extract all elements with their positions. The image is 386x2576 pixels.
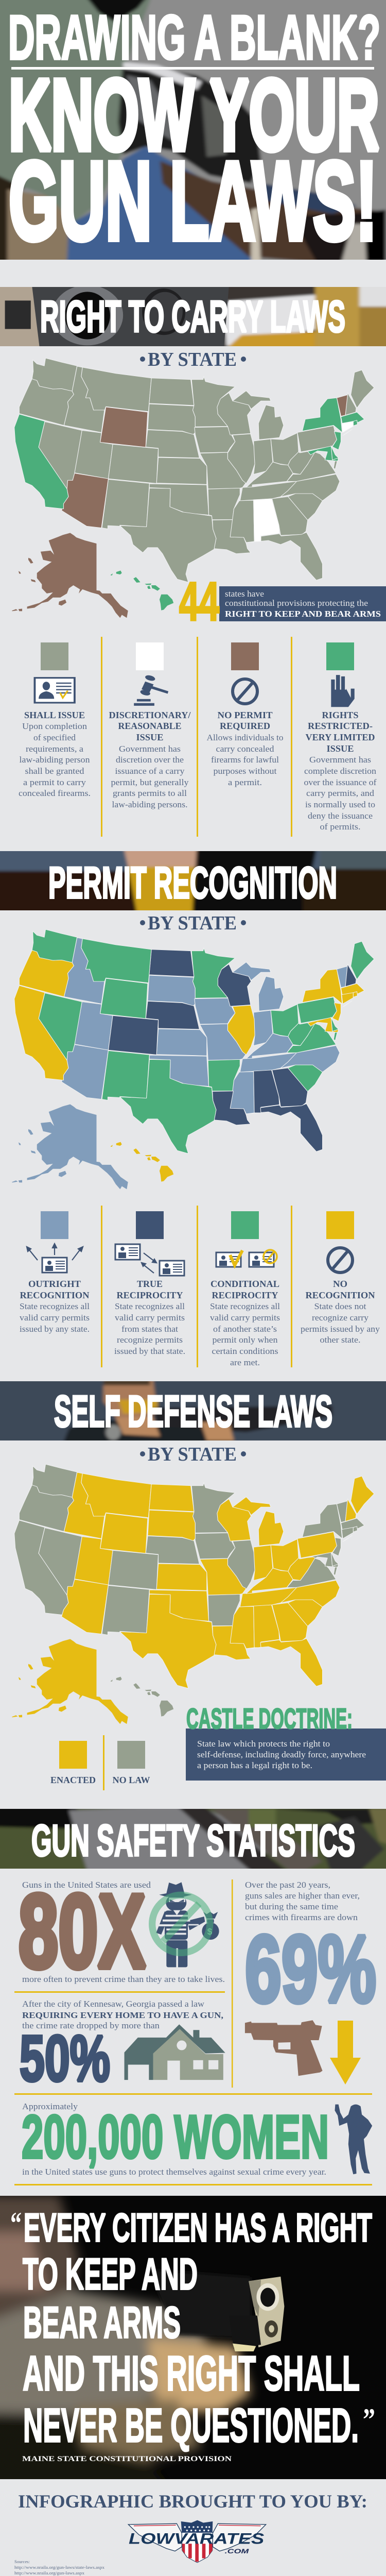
legend column: no permit required: firearms for lawful: [211, 755, 279, 765]
stat: 200,000 women: in the United states use guns to protect themselves against sexual crime every year.: [22, 2167, 326, 2177]
legend column: no recognition: RECOGNITION: [306, 1290, 375, 1300]
quote text: TO KEEP AND: [23, 2249, 198, 2299]
credit heading: INFOGRAPHIC BROUGHT TO YOU BY:: [18, 2491, 367, 2512]
legend column: true reciprocity: TRUE: [137, 1279, 163, 1289]
logo: lowvarates.com: .COM: [225, 2548, 250, 2555]
legend column: true reciprocity: recognize permits: [117, 1335, 183, 1345]
icon: robber with no sign: [152, 1882, 219, 1968]
stat: Kennesaw 50%: the crime rate dropped by more than: [22, 2021, 160, 2030]
subheading: by state: BY STATE: [148, 1444, 237, 1465]
stat: Kennesaw 50%: REQUIRING EVERY HOME TO HAVE A GUN,: [22, 2010, 223, 2020]
callout: 44 states: 44: [179, 571, 219, 632]
legend column: discretionary: DISCRETIONARY/: [109, 710, 191, 720]
legend column: discretionary: ISSUE: [136, 732, 164, 742]
icon: handgun: [245, 2020, 323, 2076]
legend column: conditional reciprocity: of another state’s: [213, 1324, 277, 1334]
legend column: outright recognition: OUTRIGHT: [28, 1279, 81, 1289]
legend column: true reciprocity: issued by that state.: [114, 1346, 185, 1356]
legend column: rights restricted: carry permits, and: [306, 788, 375, 798]
banner photo: rifle on webbing: [0, 1809, 386, 1869]
icon: house: [125, 2024, 225, 2080]
map: permit recognition by state: [12, 929, 374, 1189]
stat: 69% gun sales and crime: crimes with firearms are down: [245, 1912, 358, 1922]
stat: Kennesaw 50%: [20, 1999, 225, 2095]
quote photo: pistol pointed at viewer: [0, 2196, 386, 2479]
title: [8, 2, 380, 263]
legend column: no permit required: carry concealed: [216, 744, 274, 754]
legend column: shall issue: [19, 642, 91, 798]
legend column: discretionary: grants permits to all: [113, 788, 187, 798]
legend column: rights restricted: complete discretion: [304, 766, 377, 776]
legend column: shall issue: SHALL ISSUE: [24, 710, 85, 720]
callout: 44 states: RIGHT TO KEEP AND BEAR ARMS: [225, 609, 381, 619]
legend column: no recognition: NO: [333, 1279, 347, 1289]
legend column: true reciprocity: RECIPROCITY: [116, 1290, 183, 1300]
legend column: no permit required: NO PERMIT: [217, 710, 273, 720]
stat: 69% gun sales and crime: guns sales are higher than ever,: [245, 1891, 360, 1901]
subheading: by state: BY STATE: [148, 912, 237, 934]
legend column: shall issue: of specified: [33, 733, 76, 742]
stat: 80x crime prevention: 80X: [19, 1873, 146, 1990]
icon: robber with no sign: $: [207, 1926, 213, 1937]
legend column: discretionary: issuance of a carry: [115, 766, 185, 776]
legend column: no permit required: [207, 642, 283, 787]
legend column: outright recognition: valid carry permits: [20, 1313, 90, 1323]
stat: Kennesaw 50%: 50%: [20, 2022, 110, 2095]
callout: 44 states: states have: [225, 589, 264, 599]
legend column: rights restricted: over the issuance of: [304, 777, 377, 787]
stat: Kennesaw 50%: After the city of Kennesaw, Georgia passed a law: [22, 1999, 205, 2009]
legend column: true reciprocity: valid carry permits: [115, 1313, 185, 1323]
legend column: no recognition: [301, 1211, 380, 1345]
callout: 44 states: [179, 571, 386, 632]
legend column: outright recognition: [20, 1211, 90, 1334]
stat: 80x crime prevention: Guns in the United States are used: [22, 1880, 151, 1890]
legend: enacted / no law: [50, 1735, 150, 1790]
legend column: no recognition: recognize carry: [312, 1313, 369, 1323]
legend column: outright recognition: RECOGNITION: [20, 1290, 90, 1300]
legend column: conditional reciprocity: RECIPROCITY: [212, 1290, 278, 1300]
map: right to carry by state: [12, 358, 374, 618]
legend column: rights restricted: deny the issuance: [308, 811, 373, 821]
quote text: “: [10, 2206, 22, 2240]
stat: 69% gun sales and crime: Over the past 20 years,: [245, 1880, 330, 1890]
legend column: rights restricted: ISSUE: [326, 743, 354, 754]
legend column: conditional reciprocity: [210, 1211, 280, 1367]
legend column: rights restricted: RIGHTS: [322, 710, 358, 720]
legend: carry law categories: [19, 637, 377, 837]
legend column: shall issue: concealed firearms.: [19, 788, 91, 798]
legend column: discretionary: [109, 642, 191, 809]
legend column: no permit required: REQUIRED: [220, 721, 270, 731]
banner photo: man aiming shotgun: [0, 1381, 386, 1440]
callout: castle doctrine: a person has a legal right to be.: [197, 1760, 312, 1770]
arrow: down: [330, 2021, 361, 2084]
quote text: BEAR ARMS: [23, 2298, 181, 2347]
legend column: rights restricted: [304, 642, 377, 832]
legend column: rights restricted: RESTRICTED-: [308, 721, 373, 731]
legend column: discretionary: law-abiding persons.: [112, 800, 187, 809]
callout: 44 states: constitutional provisions protecting the: [225, 598, 368, 608]
legend: permit recognition categories: [20, 1206, 380, 1367]
legend column: outright recognition: issued by any state.: [20, 1324, 90, 1334]
legend column: rights restricted: is normally used to: [305, 800, 375, 809]
legend column: conditional reciprocity: CONDITIONAL: [210, 1279, 279, 1289]
legend column: conditional reciprocity: valid carry permits: [210, 1313, 280, 1323]
legend column: no recognition: State does not: [314, 1301, 366, 1311]
legend column: true reciprocity: [114, 1211, 185, 1356]
banner photo: pistol muzzle and brass: [0, 287, 386, 346]
sources: [14, 2560, 180, 2576]
legend column: shall issue: Upon completion: [22, 721, 87, 731]
legend column: conditional reciprocity: certain conditions: [212, 1346, 278, 1356]
stat: 200,000 women: Approximately: [22, 2102, 78, 2111]
legend column: no permit required: purposes without: [213, 766, 277, 776]
legend: enacted / no law: ENACTED: [50, 1775, 96, 1785]
logo: lowvarates.com: LOWVARATES: [129, 2530, 264, 2547]
legend column: rights restricted: of permits.: [320, 822, 360, 832]
quote text: [10, 2205, 375, 2452]
quote text: ”: [363, 2402, 375, 2436]
sources: Sources:: [14, 2560, 30, 2564]
legend column: no recognition: permits issued by any: [301, 1324, 380, 1334]
legend column: shall issue: shall be granted: [25, 766, 84, 776]
sources: http://www.nraila.org/gun-laws/state-laws.aspx: [14, 2565, 104, 2570]
legend column: true reciprocity: from states that: [121, 1324, 178, 1334]
legend column: no permit required: Allows individuals to: [207, 733, 283, 742]
legend: enacted / no law: NO LAW: [112, 1775, 150, 1785]
legend column: shall issue: a permit to carry: [23, 777, 86, 787]
legend column: no permit required: a permit.: [228, 777, 262, 787]
sources: http://www.nraila.org/gun-laws.aspx: [14, 2571, 84, 2575]
icon: woman with gun silhouette: [335, 2105, 372, 2174]
legend column: conditional reciprocity: permit only when: [212, 1335, 278, 1345]
legend column: discretionary: Government has: [119, 744, 181, 754]
legend column: shall issue: requirements, a: [26, 744, 83, 754]
legend column: conditional reciprocity: are met.: [230, 1358, 260, 1367]
subheading: by state: BY STATE: [148, 349, 237, 370]
hero photo: concealed pistol in waistband: [0, 0, 386, 260]
callout: castle doctrine: [186, 1702, 386, 1781]
legend column: discretionary: permit, but generally: [111, 777, 189, 787]
callout: castle doctrine: self-defense, including deadly force, anywhere: [197, 1750, 366, 1759]
banner photo: shooter with yellow glasses: [0, 851, 386, 910]
legend column: discretionary: discretion over the: [116, 755, 184, 765]
legend column: rights restricted: VERY LIMITED: [306, 732, 375, 742]
legend column: no recognition: other state.: [320, 1335, 360, 1345]
callout: castle doctrine: State law which protects the right to: [197, 1739, 330, 1749]
legend column: true reciprocity: State recognizes all: [115, 1301, 185, 1311]
legend column: discretionary: REASONABLE: [118, 721, 181, 731]
legend column: conditional reciprocity: State recognizes all: [210, 1301, 280, 1311]
legend column: shall issue: law-abiding person: [20, 755, 90, 765]
legend column: rights restricted: Government has: [309, 755, 371, 765]
map: self defense laws by state: [12, 1464, 374, 1724]
stat: 69% gun sales and crime: but during the same time: [245, 1902, 338, 1911]
logo: lowvarates.com: [128, 2520, 266, 2563]
quote attribution: MAINE STATE CONSTITUTIONAL PROVISION: [22, 2455, 232, 2463]
stat: 69% gun sales and crime: [245, 1880, 376, 2084]
legend column: outright recognition: State recognizes all: [20, 1301, 90, 1311]
stat: 80x crime prevention: more often to prevent crime than they are to take lives.: [22, 1974, 225, 1984]
